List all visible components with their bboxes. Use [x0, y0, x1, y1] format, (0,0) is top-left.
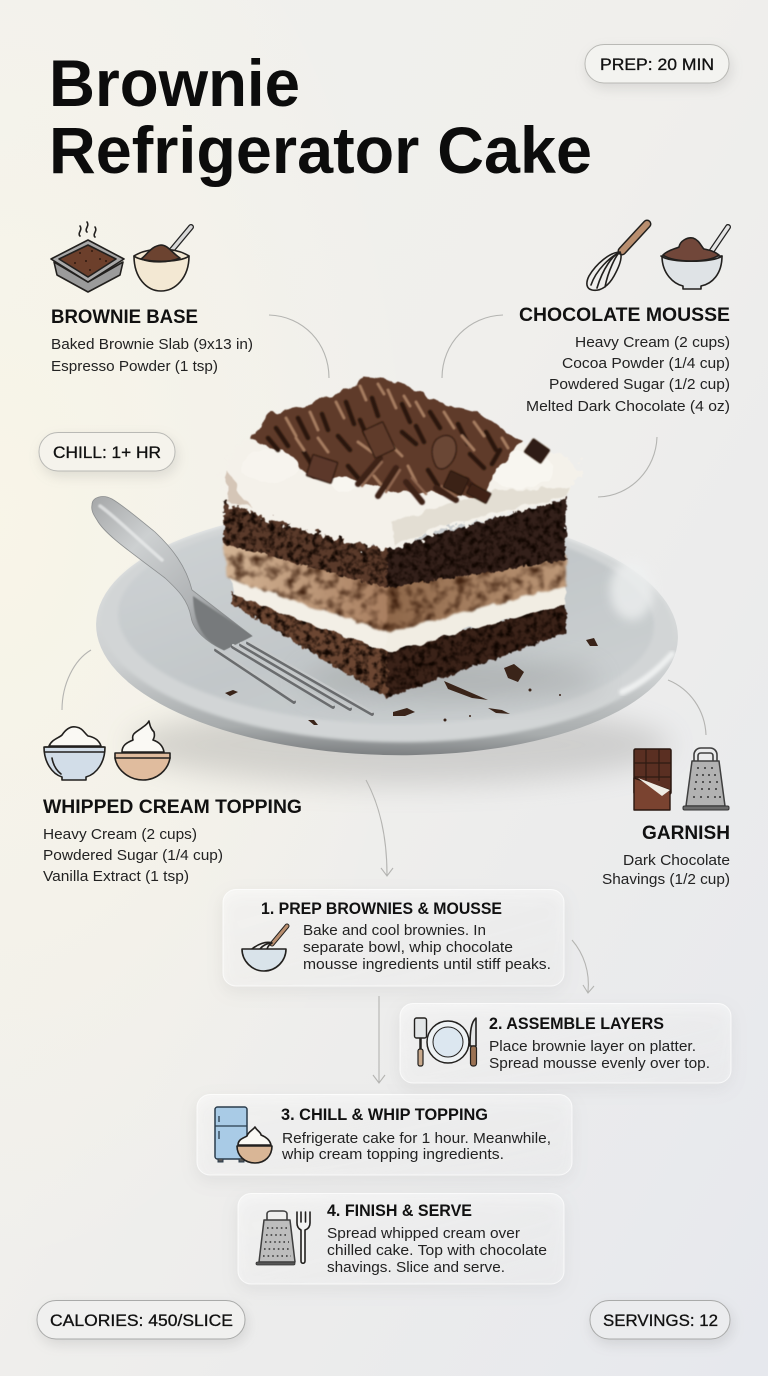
ingredient block: whipped cream topping: WHIPPED CREAM TOPPING	[43, 797, 302, 818]
card: step 1 prep brownies and mousse	[223, 890, 564, 986]
illustration: cake slice on plate with fork	[92, 377, 681, 785]
icon: whisk in bowl	[242, 926, 287, 971]
ingredient block: garnish: GARNISH	[642, 823, 730, 844]
card: step 2 assemble layers: 2. ASSEMBLE LAYERS	[489, 1015, 664, 1033]
arrow: ingredients to step 1	[366, 780, 393, 876]
connector: mousse to cake	[442, 315, 503, 378]
ingredient block: brownie base: Espresso Powder (1 tsp)	[51, 359, 218, 375]
card: step 4 finish and serve: chilled cake. Top with chocolate	[327, 1243, 547, 1259]
arrow: step 1 to step 2	[572, 940, 594, 993]
card: step 2 assemble layers: Spread mousse evenly over top.	[489, 1056, 710, 1072]
connector: whipped cream to cake	[62, 650, 91, 710]
card: step 4 finish and serve	[238, 1194, 564, 1284]
cake mousse layer	[224, 540, 566, 632]
arrow: step 1 to step 3	[373, 996, 385, 1083]
ingredient block: chocolate mousse: CHOCOLATE MOUSSE	[519, 305, 730, 326]
ingredient block: chocolate mousse: Cocoa Powder (1/4 cup)	[562, 356, 730, 372]
icon: whisk and mousse bowl	[587, 224, 728, 290]
ingredient block: whipped cream topping	[43, 797, 302, 885]
card: step 4 finish and serve: Spread whipped cream over	[327, 1226, 520, 1242]
title: Brownie	[49, 46, 300, 120]
badge: chill time	[39, 432, 175, 471]
ingredient block: garnish: Dark Chocolate	[623, 853, 730, 869]
icon: chocolate bar and grater	[634, 748, 729, 810]
card: step 1 prep brownies and mousse: Bake and cool brownies. In	[303, 923, 486, 939]
ingredient block: garnish	[602, 823, 730, 888]
connector: garnish to plate	[668, 680, 706, 735]
cake white cream layer	[228, 575, 566, 652]
ingredient block: whipped cream topping: Powdered Sugar (1/4 cup)	[43, 848, 223, 864]
card: step 2 assemble layers: Place brownie layer on platter.	[489, 1039, 696, 1055]
ingredient block: chocolate mousse	[519, 305, 730, 415]
ingredient block: whipped cream topping: Heavy Cream (2 cups)	[43, 827, 197, 843]
icon: grater and fork	[256, 1211, 310, 1265]
badge: prep time	[585, 44, 729, 83]
card: step 1 prep brownies and mousse: mousse ingredients until stiff peaks.	[303, 957, 551, 973]
ingredient block: brownie base	[51, 307, 253, 375]
card: step 4 finish and serve: shavings. Slice and serve.	[327, 1260, 505, 1276]
icon: fridge and cream bowl	[215, 1107, 272, 1163]
cake upper brownie layer	[224, 498, 566, 588]
card: step 3 chill and whip topping	[197, 1094, 572, 1175]
card: step 3 chill and whip topping: 3. CHILL & WHIP TOPPING	[281, 1106, 488, 1124]
card: step 3 chill and whip topping: whip cream topping ingredients.	[281, 1147, 504, 1163]
connector: brownie base to cake	[269, 315, 329, 378]
plate	[93, 499, 681, 785]
ingredient block: whipped cream topping: Vanilla Extract (1 tsp)	[43, 869, 189, 885]
card: step 1 prep brownies and mousse: 1. PREP BROWNIES & MOUSSE	[261, 900, 502, 918]
badge: calories: CALORIES: 450/SLICE	[50, 1312, 233, 1330]
ingredient block: chocolate mousse: Powdered Sugar (1/2 cup)	[549, 377, 730, 393]
whipped cream topping	[224, 410, 579, 548]
chocolate shavings	[250, 377, 550, 503]
card: step 2 assemble layers	[400, 1004, 731, 1083]
card: step 4 finish and serve: 4. FINISH & SERVE	[327, 1202, 472, 1220]
connector: mousse to garnish side	[598, 437, 657, 497]
ingredient block: chocolate mousse: Melted Dark Chocolate (4 oz)	[526, 399, 730, 415]
badge: chill time: CHILL: 1+ HR	[53, 444, 161, 462]
title	[49, 46, 592, 187]
chocolate crumbs on plate	[225, 638, 598, 725]
badge: prep time: PREP: 20 MIN	[600, 56, 714, 74]
icon: whipped cream bowls	[44, 721, 170, 780]
cream shading and dollops	[226, 450, 570, 546]
ingredient block: brownie base: BROWNIE BASE	[51, 307, 198, 328]
badge: servings	[590, 1300, 730, 1339]
icon: brownie pan and cocoa bowl	[51, 222, 191, 292]
card: step 1 prep brownies and mousse: separate bowl, whip chocolate	[303, 940, 513, 956]
fork	[92, 497, 372, 714]
badge: calories	[37, 1300, 245, 1339]
title: Refrigerator Cake	[49, 113, 592, 187]
ingredient block: brownie base: Baked Brownie Slab (9x13 in)	[51, 337, 253, 353]
icon: spatula, plate and knife	[414, 1018, 476, 1066]
card: step 3 chill and whip topping: Refrigerate cake for 1 hour. Meanwhile,	[282, 1131, 551, 1147]
ingredient block: garnish: Shavings (1/2 cup)	[602, 872, 730, 888]
badge: servings: SERVINGS: 12	[603, 1312, 718, 1330]
ingredient block: chocolate mousse: Heavy Cream (2 cups)	[575, 335, 730, 351]
cake bottom brownie layer	[232, 592, 566, 698]
